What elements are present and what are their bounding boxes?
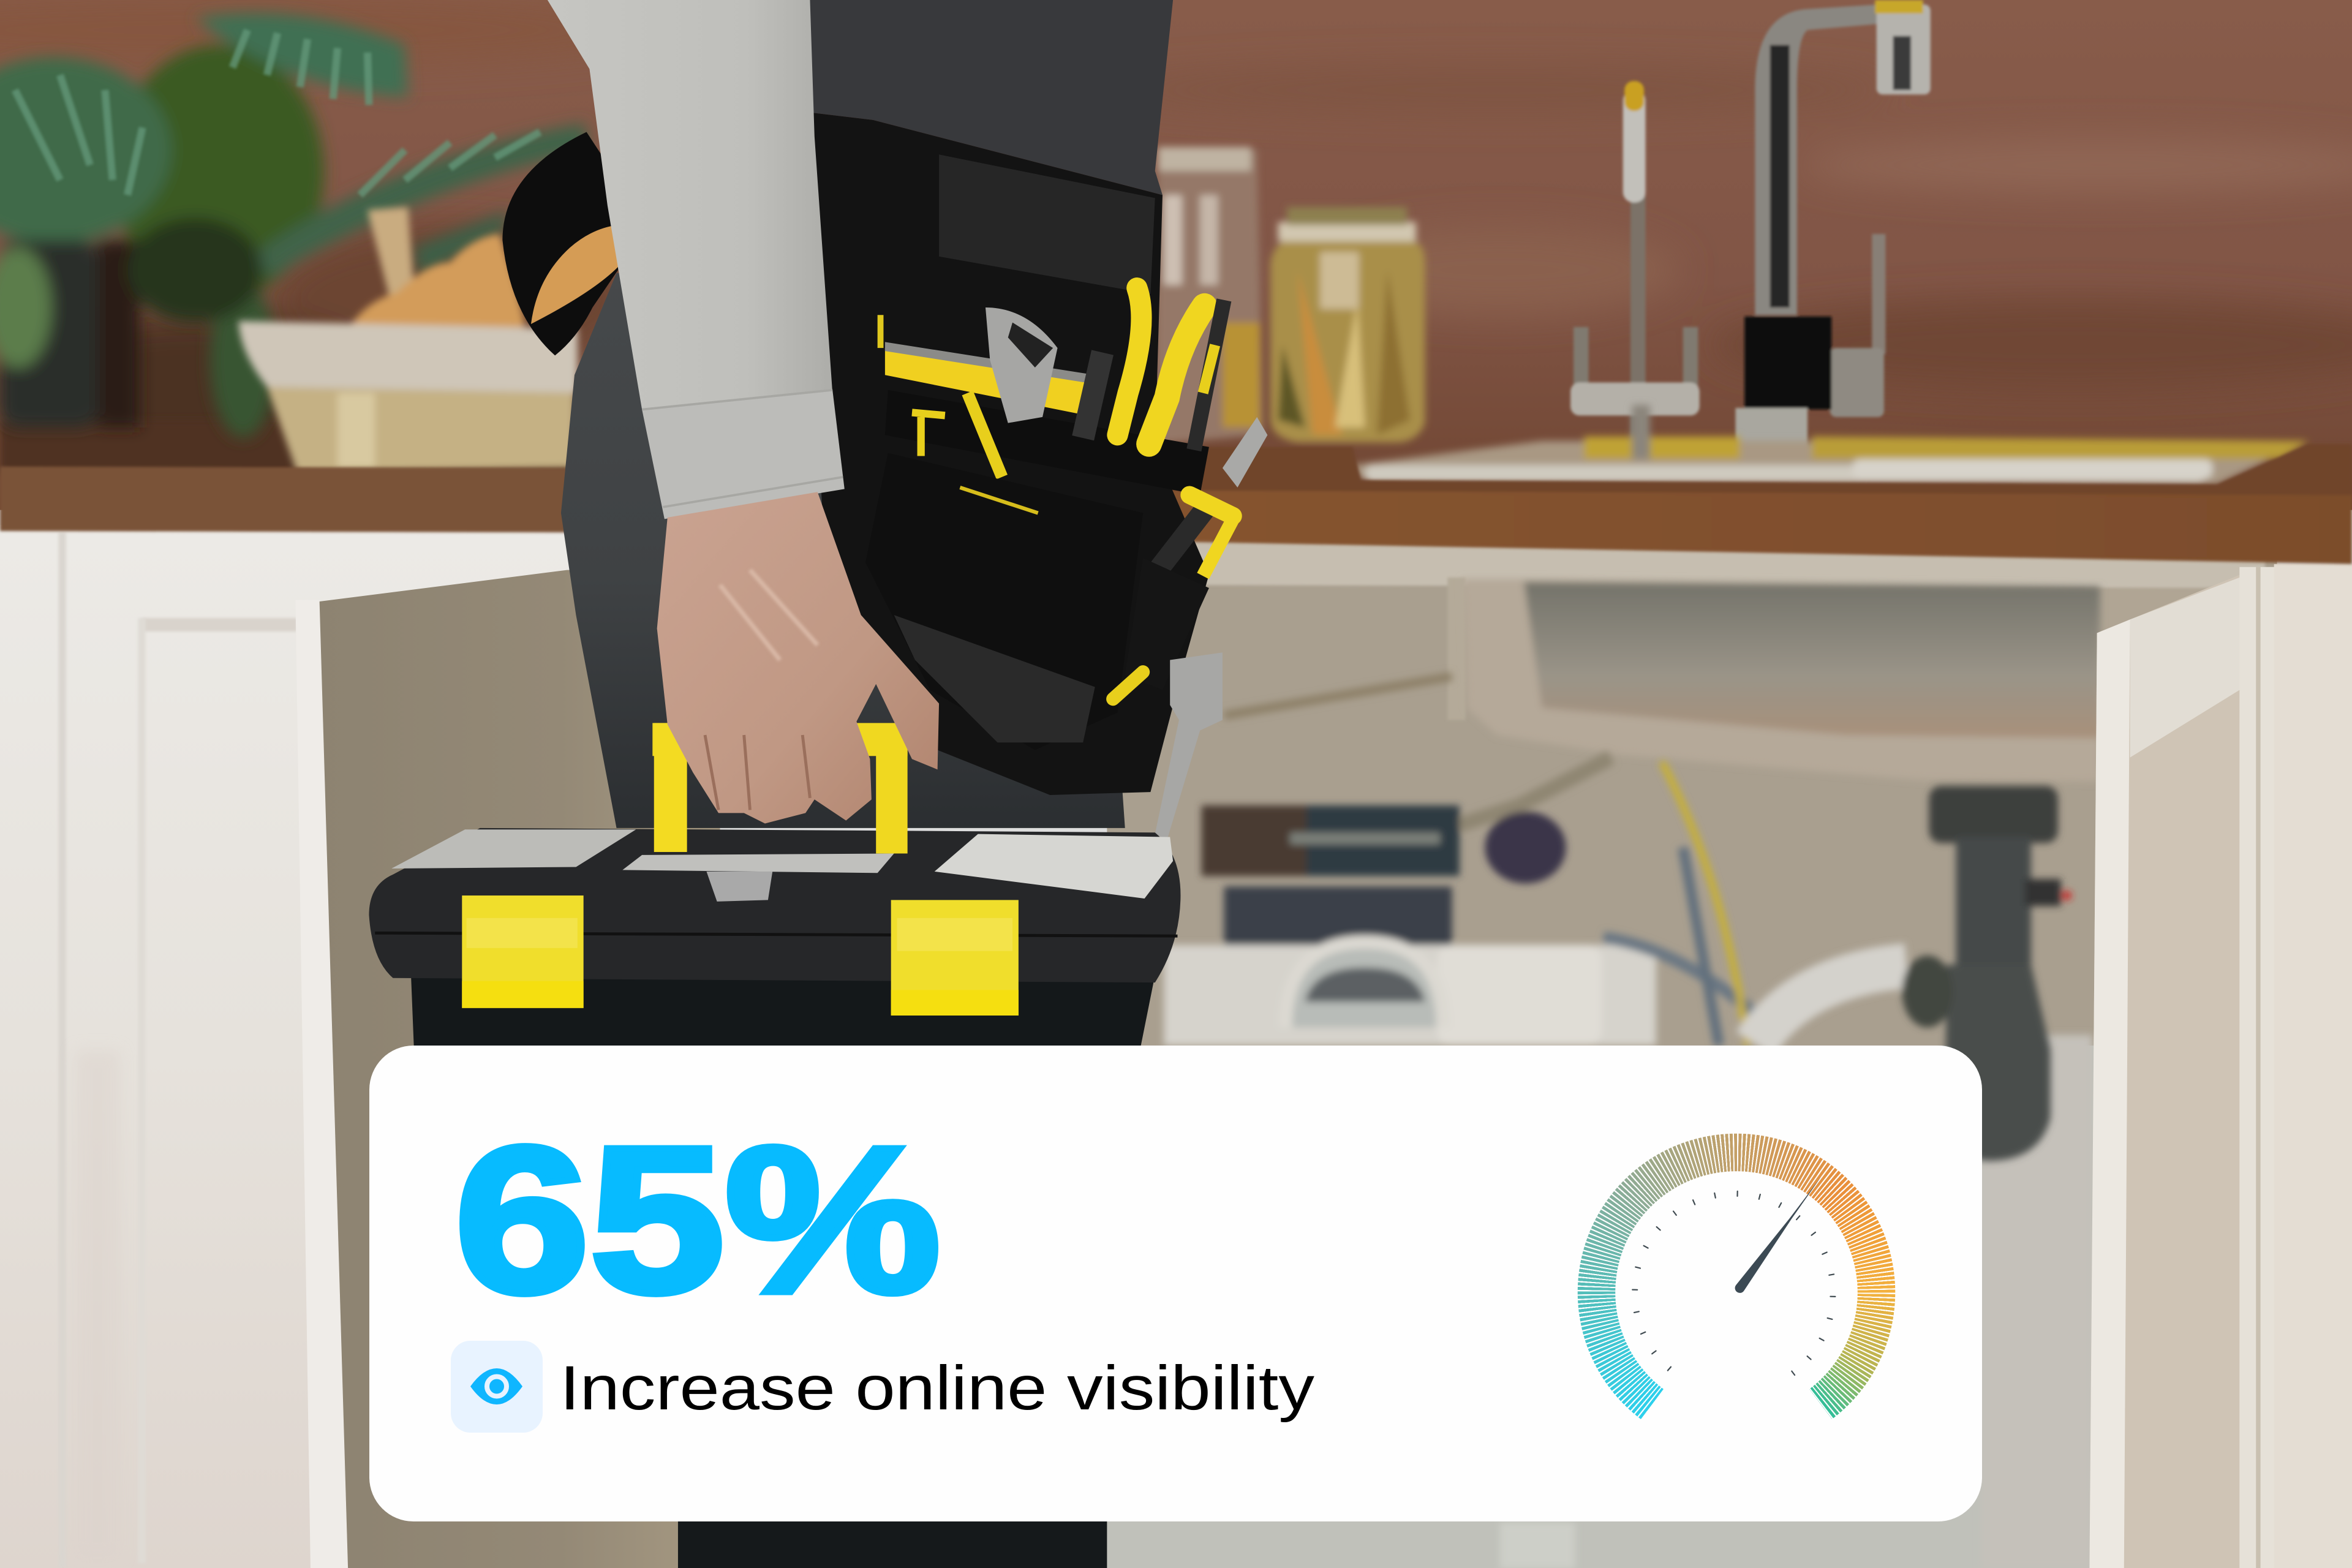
needle <box>1735 1177 1821 1293</box>
torso <box>810 0 1173 195</box>
open left door edge <box>295 600 348 1568</box>
left yellow clasp <box>462 895 584 1008</box>
worker <box>369 0 1267 1568</box>
screwdriver and tool handles <box>1083 353 1102 438</box>
handle <box>652 723 908 853</box>
left cabinet <box>0 525 600 1568</box>
wood wall backsplash <box>0 0 2352 510</box>
left counter surface <box>0 420 600 474</box>
countertop left <box>0 467 600 532</box>
icon: eye in a rounded tile <box>451 1341 543 1433</box>
toolbox lid <box>369 828 1180 982</box>
sink rim <box>1353 405 2309 484</box>
tool pouch <box>810 113 1267 840</box>
black side strap with bread cut-out <box>502 132 618 355</box>
right yellow clasp <box>891 900 1019 1016</box>
caption: Increase online visibility <box>560 1353 1314 1423</box>
under-sink cavity <box>1107 540 2277 1568</box>
speedometer gauge <box>1578 1133 1895 1419</box>
pliers <box>986 307 1058 423</box>
toolbox lower body <box>411 975 1155 1050</box>
sink basin <box>1463 579 2100 782</box>
plants <box>0 13 588 438</box>
left cabinet interior <box>320 570 720 1568</box>
centre latch <box>706 872 772 902</box>
leg below the card <box>678 1500 1107 1568</box>
metal wrench <box>1155 652 1223 840</box>
hand <box>657 492 939 823</box>
toolbox <box>369 723 1180 1050</box>
gauge ticks and needle <box>1632 1177 1836 1376</box>
headline number 65%: 65% <box>454 1104 941 1336</box>
tick marks <box>1632 1191 1835 1375</box>
sweater sleeve <box>548 0 845 519</box>
pipes and appliances <box>1164 676 2071 1161</box>
bread basket <box>238 207 578 472</box>
stat card <box>369 1046 1982 1521</box>
gradient arc of radial bars <box>1578 1133 1895 1419</box>
glass jars <box>1155 147 1425 444</box>
cutters <box>1223 417 1267 488</box>
countertop right <box>1170 444 2352 564</box>
faucets <box>1570 0 1931 462</box>
trousers <box>561 270 1125 828</box>
open right door and cabinet <box>2089 564 2352 1568</box>
pouch front pocket <box>865 453 1143 750</box>
clear lid panes <box>391 829 636 869</box>
